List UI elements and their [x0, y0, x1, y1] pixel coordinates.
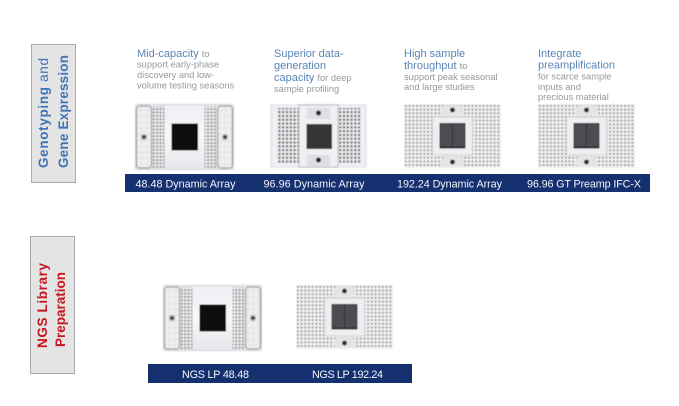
chip image: 48.48 Dynamic Array [135, 104, 234, 170]
text block: High sample throughput: High sample [404, 48, 465, 60]
chip image: 96.96 GT Preamp IFC-X [538, 104, 635, 168]
text block: Superior data-generation capacity: sample profiling [274, 84, 339, 94]
text block: High sample throughput [404, 48, 498, 92]
chip image: NGS LP 192.24 [296, 285, 393, 349]
text block: Integrate preamplification: for scarce sample [538, 72, 611, 82]
text block: Superior data-generation capacity: generation [274, 60, 326, 72]
category label: Genotyping and Gene Expression: Genotyping and [36, 58, 51, 168]
text block: Superior data-generation capacity: capacity for deep [274, 72, 352, 84]
label bar: genotyping products: 192.24 Dynamic Array [397, 178, 503, 190]
label bar: genotyping products: 96.96 Dynamic Array [264, 178, 365, 190]
text block: High sample throughput: and large studies [404, 82, 475, 92]
text block: Integrate preamplification: Integrate [538, 48, 581, 60]
category label: NGS Library Preparation: NGS Library [35, 263, 50, 348]
text block: Integrate preamplification: precious material [538, 92, 609, 102]
text block: Mid-capacity: support early-phase [137, 60, 219, 70]
text block: Integrate preamplification [538, 48, 615, 102]
text block: Mid-capacity [137, 48, 235, 90]
chip image: NGS LP 48.48 [163, 285, 262, 351]
label bar: genotyping products: 96.96 GT Preamp IFC-X [527, 178, 641, 190]
text block: High sample throughput: support peak seasonal [404, 72, 498, 82]
text block: Mid-capacity: volume testing seasons [137, 80, 235, 90]
label bar: genotyping products [125, 174, 650, 192]
label bar: NGS products [148, 364, 412, 383]
text block: Integrate preamplification: preamplification [538, 60, 615, 72]
text block: Superior data-generation capacity [274, 48, 352, 94]
label bar: genotyping products: 48.48 Dynamic Array [136, 178, 236, 190]
category label: NGS Library Preparation: Preparation [53, 272, 68, 347]
text block: Mid-capacity: Mid-capacity to [137, 48, 210, 60]
text block: Integrate preamplification: inputs and [538, 82, 581, 92]
category label: Genotyping and Gene Expression: Gene Expression [56, 55, 71, 168]
label bar: NGS products: NGS LP 48.48 [182, 369, 249, 381]
label bar: NGS products: NGS LP 192.24 [312, 369, 383, 381]
text block: High sample throughput: throughput to [404, 60, 467, 72]
chip image: 192.24 Dynamic Array [404, 104, 501, 168]
category label: Genotyping and Gene Expression [32, 44, 76, 182]
text block: Superior data-generation capacity: Superior data- [274, 48, 344, 60]
chip image: 96.96 Dynamic Array [270, 104, 367, 168]
text block: Mid-capacity: discovery and low- [137, 70, 214, 80]
category label: NGS Library Preparation [30, 236, 74, 374]
